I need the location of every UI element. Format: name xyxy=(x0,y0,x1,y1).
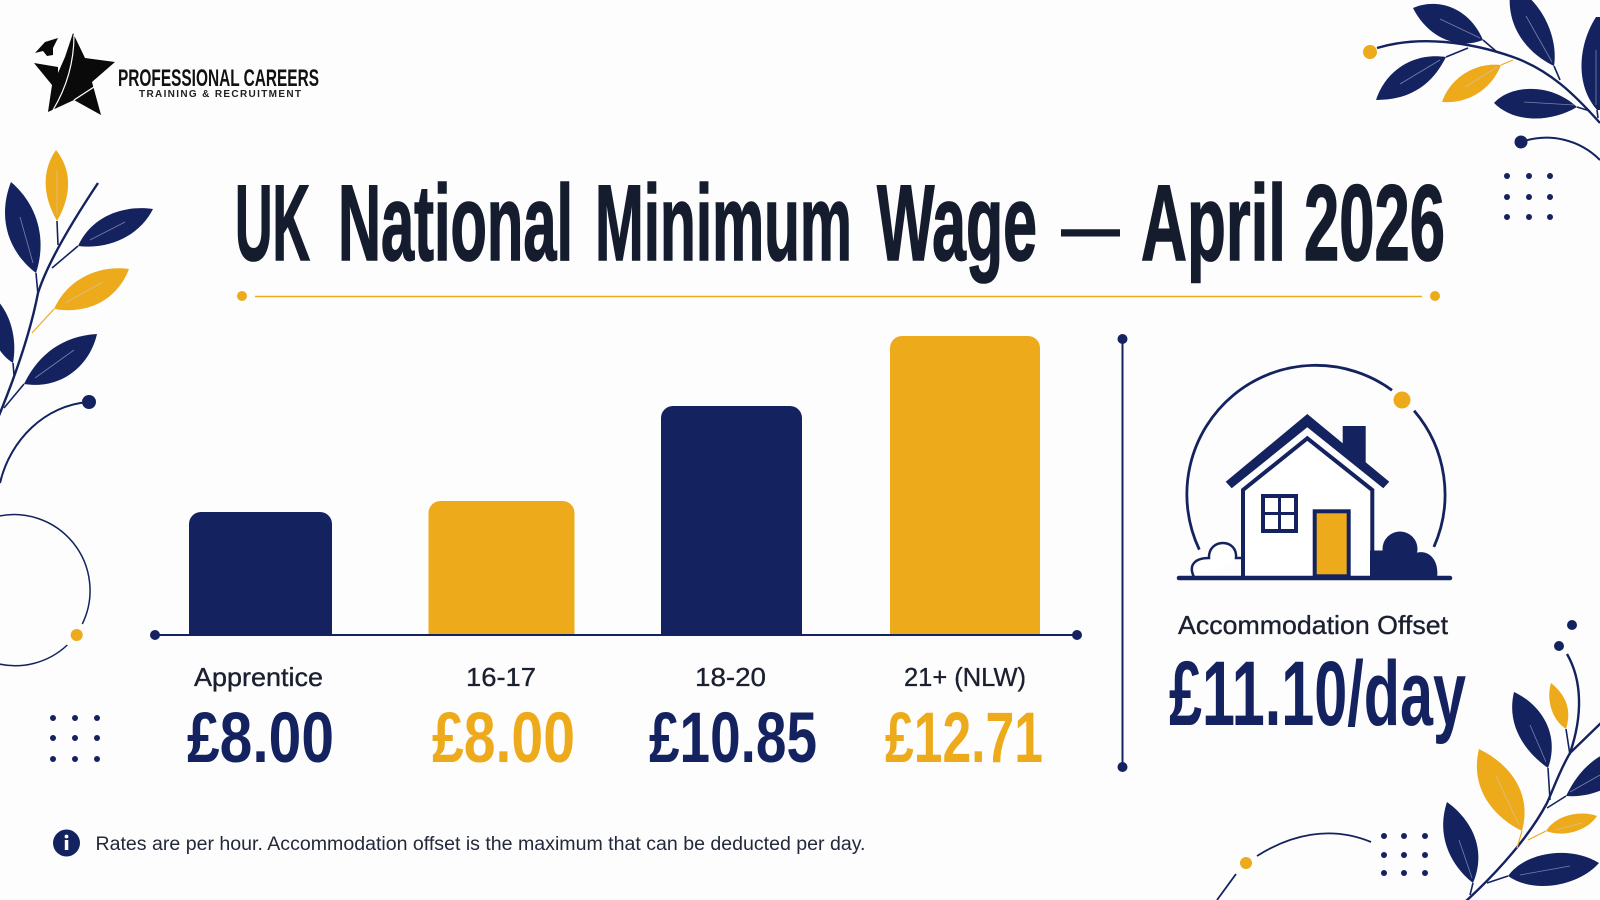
leaf xyxy=(1442,65,1501,102)
decoration: top-right curl xyxy=(1514,136,1600,160)
title: Minimum xyxy=(595,162,852,283)
bar: Apprentice xyxy=(189,512,332,635)
leaf xyxy=(1494,89,1577,119)
leaf xyxy=(1508,853,1599,886)
label: 16-17: 16-17 xyxy=(466,662,536,692)
title: 2026 xyxy=(1304,162,1445,283)
icon: info xyxy=(53,830,80,856)
decoration: bottom-right branch xyxy=(1443,620,1600,900)
leaf xyxy=(1512,692,1552,768)
value: Apprentice: £8.00 xyxy=(187,699,334,778)
bar: 18-20 xyxy=(661,406,802,635)
icon: house xyxy=(1179,365,1450,578)
title: — xyxy=(1061,162,1120,283)
chart axis xyxy=(150,630,1082,640)
leaf xyxy=(1510,0,1555,66)
label: Apprentice: Apprentice xyxy=(194,662,323,692)
title: April xyxy=(1141,162,1286,283)
value: 16-17: £8.00 xyxy=(432,699,575,778)
bar chart xyxy=(150,336,1082,778)
label: 18-20: 18-20 xyxy=(695,662,766,692)
logo name: PROFESSIONAL CAREERS xyxy=(118,65,319,92)
decoration: top-right branch xyxy=(1363,0,1600,123)
vertical divider xyxy=(1118,334,1128,772)
title: Wage xyxy=(877,162,1037,283)
leaf xyxy=(1566,755,1600,796)
title: UK xyxy=(235,162,310,283)
leaf xyxy=(54,268,129,310)
leaf xyxy=(0,298,14,363)
leaf xyxy=(46,150,68,221)
title: National xyxy=(338,162,573,283)
leaf xyxy=(1581,17,1600,110)
leaf xyxy=(1546,814,1597,834)
decoration: top-right dot grid xyxy=(1504,173,1553,220)
label: Accommodation Offset: Accommodation Offset xyxy=(1178,610,1449,640)
title rule xyxy=(237,291,1440,301)
label: 21+ (NLW): 21+ (NLW) xyxy=(904,662,1026,692)
leaf xyxy=(1376,56,1446,100)
title xyxy=(235,162,1445,283)
leaf xyxy=(78,208,153,247)
leaf xyxy=(5,182,41,273)
decoration: left dot grid xyxy=(50,715,100,762)
logo tagline: TRAINING & RECRUITMENT xyxy=(139,89,301,100)
footnote xyxy=(53,830,866,856)
leaf xyxy=(1413,4,1483,43)
icon: star with quill xyxy=(34,33,115,115)
value: 18-20: £10.85 xyxy=(649,699,817,778)
footnote text: Rates are per hour. Accommodation offset is the maximum that can be deducted per day. xyxy=(96,834,866,855)
decoration: left curl and ring xyxy=(0,395,96,666)
bar: 16-17 xyxy=(428,501,574,635)
value: 21+ (NLW): £12.71 xyxy=(885,699,1043,778)
logo xyxy=(34,33,319,115)
leaf xyxy=(1477,749,1525,831)
bar: 21+ (NLW) xyxy=(890,336,1040,635)
leaf xyxy=(24,334,97,385)
decoration: left branch xyxy=(0,150,153,418)
decoration: bottom-centre curve xyxy=(1217,833,1371,900)
decoration: bottom-right dot grid xyxy=(1381,833,1428,876)
leaf xyxy=(1549,683,1568,729)
leaf xyxy=(1443,802,1478,883)
